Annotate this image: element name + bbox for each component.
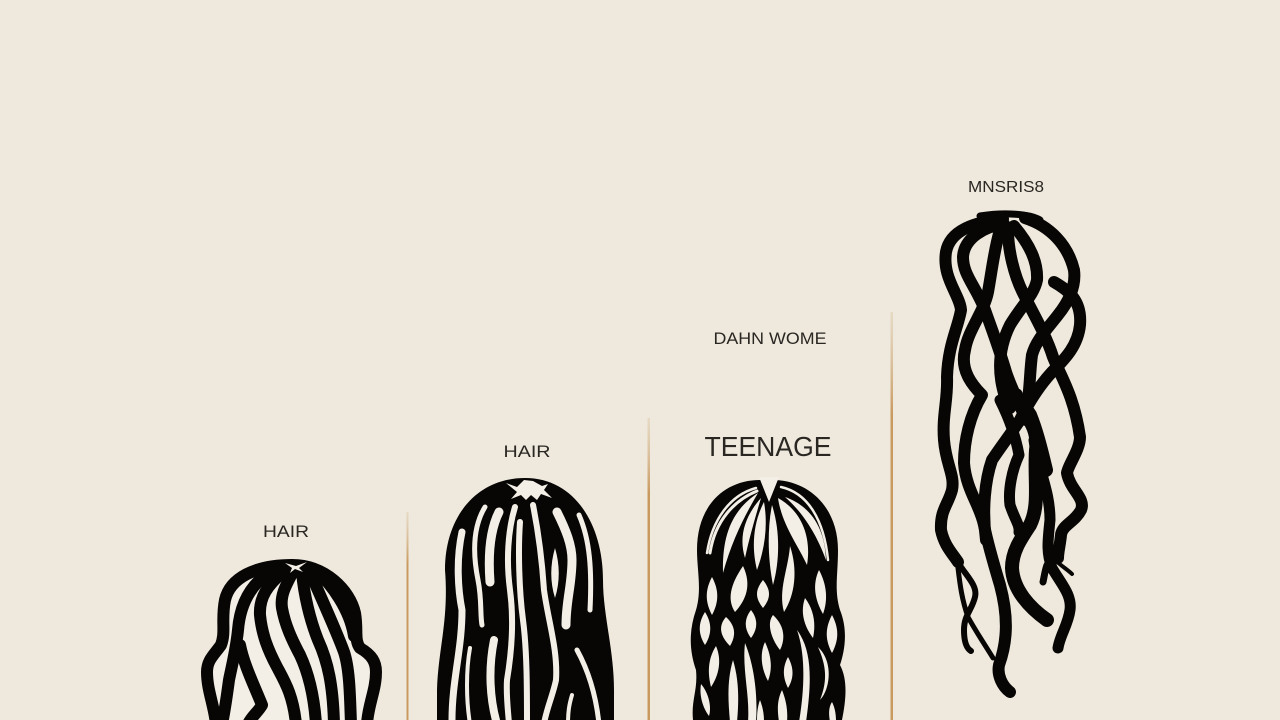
label: hair 1: HAIR: [263, 522, 309, 541]
divider line 3: [890, 312, 893, 720]
icon: hair 1: [206, 560, 376, 720]
label: top stage: MNSRIS8: [968, 179, 1044, 196]
column 1: short hair stage: [206, 522, 376, 720]
heading: teenage: TEENAGE: [704, 431, 832, 462]
icon: hair 3: [691, 477, 846, 720]
label: dawn women: DAHN WOME: [714, 329, 826, 348]
icon: hair 4: [941, 214, 1082, 692]
icon: hair 2: [437, 478, 614, 720]
divider line 1: [406, 512, 408, 720]
column 4: mature stage: [941, 179, 1082, 692]
column 3: teenage stage: [691, 329, 846, 720]
column 2: long straight hair stage: [437, 442, 614, 720]
label: hair 2: HAIR: [504, 442, 550, 461]
divider line 2: [648, 418, 650, 720]
